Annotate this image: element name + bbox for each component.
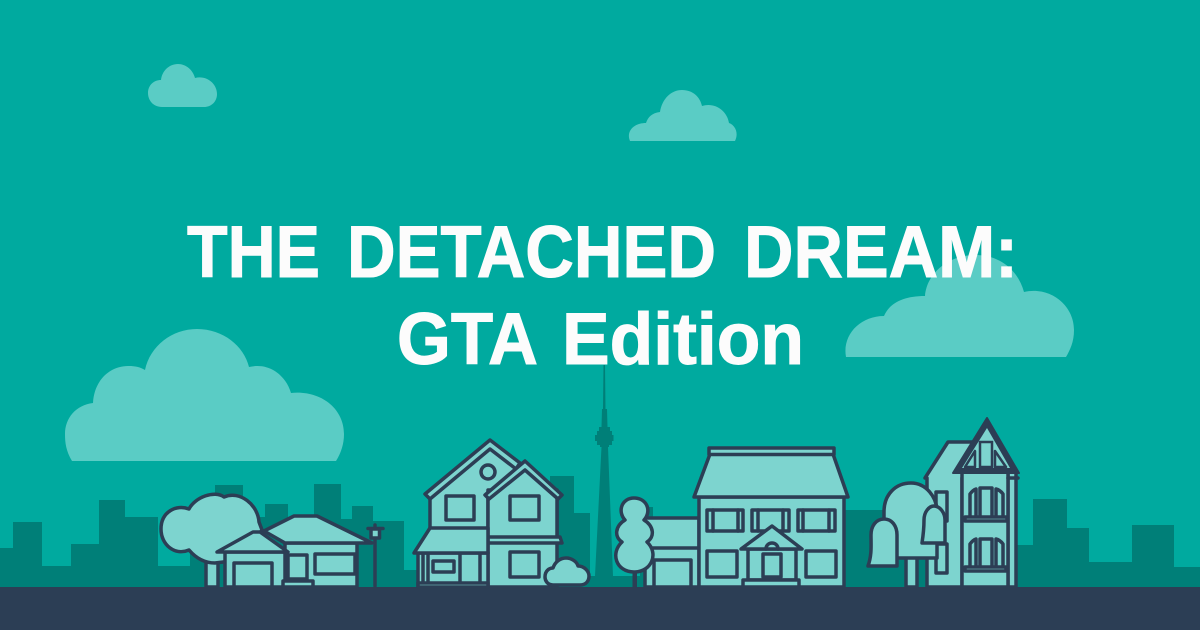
portico: [741, 526, 802, 587]
title line 2: [397, 297, 804, 380]
tree: topiary: [616, 498, 653, 587]
shrub: right: [922, 506, 945, 543]
clouds: [65, 64, 1074, 461]
bungalow: [217, 516, 372, 587]
skyline: right: [640, 499, 1200, 587]
house: Victorian with gable: [925, 418, 1019, 587]
title line 1: THE: [187, 210, 320, 293]
title line 1: DREAM:: [744, 210, 1018, 293]
CN tower: [590, 365, 640, 587]
title line 1: [187, 210, 1018, 293]
title line 2: Edition: [562, 297, 804, 380]
street lamp: [368, 525, 383, 586]
cloud: top left: [148, 64, 217, 107]
title line 1: DETACHED: [347, 210, 716, 293]
house: large with garage wing: [645, 448, 848, 587]
house: two storey with porch: [414, 440, 589, 587]
ground: [0, 587, 1200, 630]
cloud: top centre: [629, 90, 737, 141]
house group: tree, bungalow and lamp: [161, 494, 383, 587]
title: [187, 210, 1018, 380]
tree: round: [161, 494, 262, 587]
bush: [545, 558, 589, 585]
title line 2: GTA: [397, 297, 538, 380]
trees: dome and shrubs: [868, 483, 945, 587]
skyline: left: [0, 476, 590, 587]
garage wing: [645, 518, 699, 587]
cloud: left large: [65, 329, 344, 461]
cloud: right: [845, 255, 1074, 357]
shrub: left: [868, 519, 897, 566]
